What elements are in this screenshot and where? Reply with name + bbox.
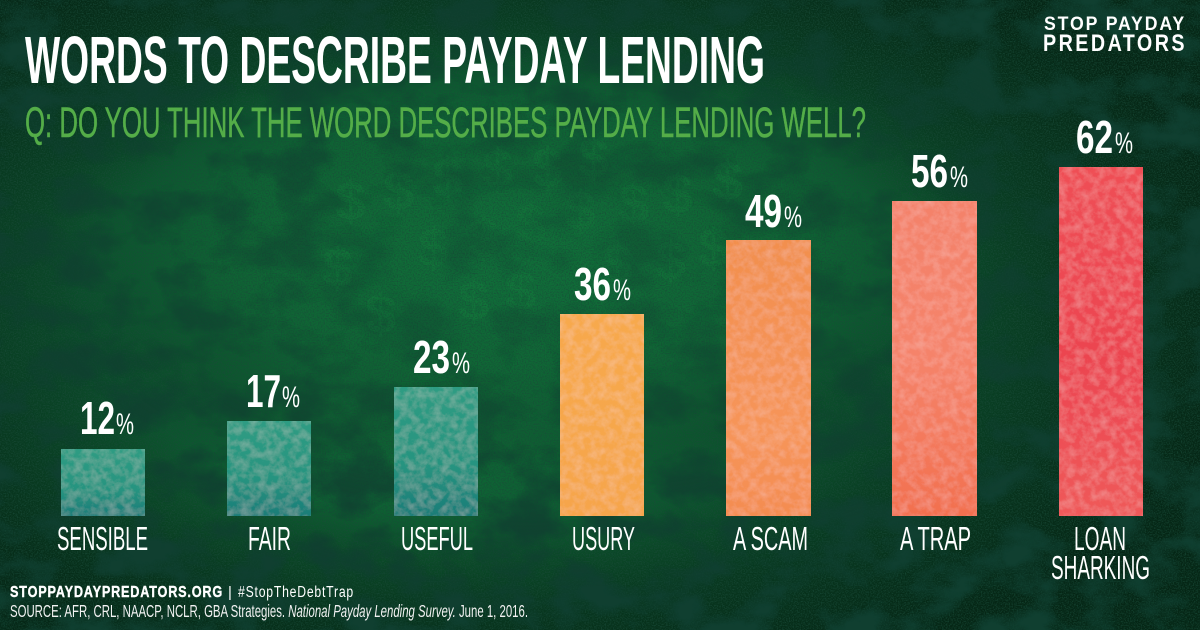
footer website and hashtag: STOPPAYDAYPREDATORS.ORG bbox=[10, 584, 223, 601]
faint dollar sign pattern: $ bbox=[418, 216, 449, 279]
bar: Loan Sharking 62% bbox=[1051, 111, 1150, 586]
faint dollar sign pattern: $ bbox=[505, 259, 536, 322]
faint dollar sign pattern: $ bbox=[578, 126, 609, 189]
source note: SOURCE: AFR, CRL, NAACP, NCLR, GBA Strategies. National Payday Lending Survey. June 1, 2016. bbox=[10, 601, 528, 621]
bar: Fair 17%: 17 bbox=[246, 365, 281, 417]
faint dollar sign pattern: $ bbox=[655, 229, 686, 292]
faint dollar sign pattern: $ bbox=[698, 216, 729, 279]
faint dollar sign pattern: $ bbox=[565, 179, 596, 242]
bar: Loan Sharking 62%: 62 bbox=[1076, 111, 1113, 163]
footer website and hashtag: #StopTheDebtTrap bbox=[238, 584, 354, 601]
faint dollar sign pattern: $ bbox=[618, 172, 649, 235]
logo: Stop Payday Predators bbox=[1043, 14, 1187, 57]
bar: Loan Sharking 62%: LOAN bbox=[1074, 520, 1126, 557]
bar: Usury 36% bbox=[560, 258, 644, 557]
bar: Fair 17%: FAIR bbox=[248, 520, 291, 557]
faint dollar sign pattern: $ bbox=[322, 236, 353, 299]
faint dollar sign pattern: $ bbox=[602, 232, 633, 295]
faint dollar sign pattern: $ bbox=[482, 137, 513, 200]
faint dollar sign pattern: $ bbox=[662, 162, 693, 225]
bar: A Trap 56%: % bbox=[950, 161, 968, 194]
bar: Useful 23% bbox=[394, 331, 478, 557]
bar: Usury 36%: % bbox=[613, 274, 631, 307]
footer website and hashtag: | bbox=[228, 584, 232, 601]
bar chart bbox=[57, 111, 1150, 586]
faint dollar sign pattern: $ bbox=[515, 192, 546, 255]
bar: A Trap 56%: A TRAP bbox=[900, 520, 971, 557]
bar: Useful 23%: 23 bbox=[413, 331, 450, 383]
faint dollar sign pattern: $ bbox=[458, 269, 489, 332]
logo: Stop Payday Predators: STOP PAYDAY bbox=[1044, 14, 1186, 35]
bar: Usury 36%: 36 bbox=[574, 258, 611, 310]
bar: Sensible 12%: 12 bbox=[80, 392, 115, 444]
faint dollar sign pattern: $ bbox=[365, 282, 396, 345]
bar: Usury 36%: USURY bbox=[572, 520, 635, 557]
faint dollar sign pattern: $ bbox=[712, 149, 743, 212]
faint dollar sign pattern: $ bbox=[532, 136, 563, 199]
faint dollar sign pattern: $ bbox=[432, 146, 463, 209]
bar: Sensible 12%: % bbox=[116, 408, 134, 441]
faint dollar sign pattern: $ bbox=[335, 169, 366, 232]
bar: Sensible 12%: SENSIBLE bbox=[57, 520, 148, 557]
bar: A Scam 49%: % bbox=[784, 201, 802, 234]
bar: A Trap 56% bbox=[892, 145, 977, 557]
faint dollar sign pattern bbox=[322, 126, 743, 345]
faint dollar sign pattern: $ bbox=[468, 206, 499, 269]
bar: A Trap 56%: 56 bbox=[911, 145, 948, 197]
bar: Useful 23%: USEFUL bbox=[401, 520, 473, 557]
bar: Fair 17%: % bbox=[282, 381, 300, 414]
bar: Fair 17% bbox=[227, 365, 311, 557]
bar: A Scam 49%: 49 bbox=[745, 185, 782, 237]
bar: A Scam 49%: A SCAM bbox=[733, 520, 808, 557]
bar: Sensible 12% bbox=[57, 392, 148, 557]
bar: Loan Sharking 62%: % bbox=[1115, 127, 1133, 160]
faint dollar sign pattern: $ bbox=[383, 159, 414, 222]
bar: A Scam 49% bbox=[726, 185, 811, 557]
bar: Useful 23%: % bbox=[452, 347, 470, 380]
